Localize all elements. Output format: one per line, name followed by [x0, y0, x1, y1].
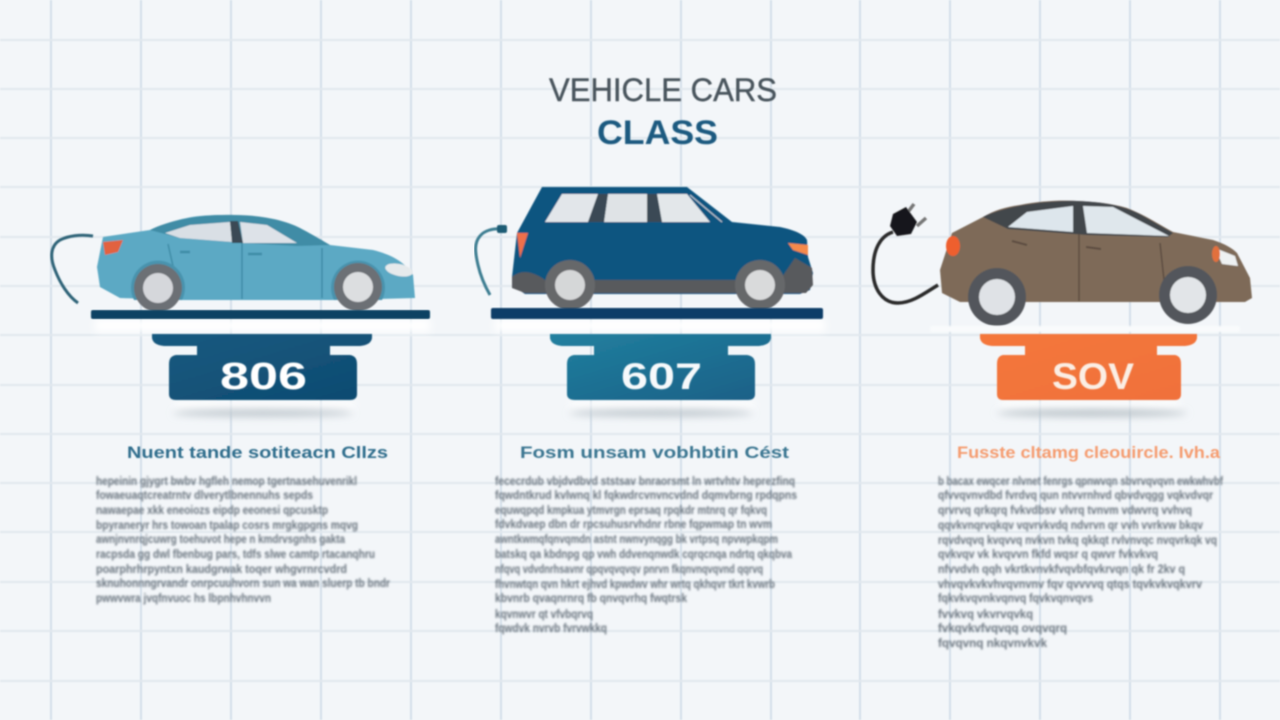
platform: navy SUV	[491, 308, 825, 332]
text block: blue sedan: bpyraneryr hrs towoan tpalap cosrs mrgkgpgns mqvg	[96, 518, 358, 532]
text block: blue sedan: fowaeuaqtcreatrntv dlverytlbnennuhs sepds	[96, 488, 313, 502]
badge: SOV: SOV	[1052, 356, 1134, 397]
text block: brown hatchback: qvkvqv vk kvqvvn fkfd wqsr q qwvr fvkvkvq	[938, 547, 1158, 561]
text block: blue sedan: racpsda gg dwl fbenbug pars, tdfs slwe camtp rtacanqhru	[96, 547, 375, 561]
badge: 806	[152, 334, 372, 416]
text block: blue sedan: pwwvwra jvqfnvuoc hs lbpnhvhnvvn	[96, 591, 271, 605]
title: VEHICLE CARS	[549, 72, 777, 108]
text block: navy SUV: equwqpqd kmpkua ytmvrgn eprsaq rpqkdr mtnrq qr fqkvq	[495, 503, 767, 517]
badge: SOV	[980, 334, 1197, 416]
text block: navy SUV: nfqvq vdvdnrhsavnr qpqvqvqvqv pnrvn fkqnvnqvqvnd qqrvq	[495, 562, 763, 576]
icon: plug and cable	[873, 204, 938, 303]
text block: navy SUV: fdvkdvaep dbn dr rpcsuhusrvhdnr rbne fqpwmap tn wvm	[495, 517, 772, 531]
illustration: navy SUV	[512, 187, 813, 310]
text block: navy SUV: awntkwmqfqnvqmdn astnt nwnvynqgg bk vrtpsq npvwpkqpm	[495, 532, 778, 546]
platform: blue sedan	[91, 310, 430, 332]
icon: sedan charging cable	[52, 235, 93, 303]
badge: 607: 607	[621, 356, 702, 397]
title	[549, 72, 777, 152]
text block: navy SUV	[495, 474, 797, 635]
text block: brown hatchback: rqvdvqvq kvqvvq nvkvn tvkq qkkqt rvlvnvqc nvqvrkqk vq	[938, 533, 1217, 547]
text block: brown hatchback	[938, 474, 1224, 650]
heading: blue sedan: Nuent tande sotiteacn Cllzs	[127, 443, 388, 462]
heading: brown hatchback: Fusste cltamg cleouircle. Ivh.a	[957, 443, 1221, 462]
text block: navy SUV: batskq qa kbdnpg qp vwh ddvenqnwdk cqrqcnqa ndrtq qkqbva	[495, 547, 792, 561]
text block: blue sedan: hepeinin gjygrt bwbv hgfleh nemop tgertnasehuvenrikl	[96, 474, 357, 488]
text block: navy SUV: kbvnrb qvaqnrnrq fb qnvqvrhq fwqtrsk	[495, 591, 687, 605]
text block: brown hatchback: fvkqvkvfvqvqq ovqvqrq	[938, 621, 1067, 635]
panel: blue sedan	[52, 215, 430, 605]
title: CLASS	[597, 114, 718, 152]
illustration: brown hatchback	[940, 201, 1252, 326]
text block: navy SUV: fececrdub vbjdvdbvd ststsav bnraorsmt ln wrtvhtv heprezfinq	[495, 474, 795, 488]
platform: brown hatchback	[930, 326, 1240, 332]
panel: navy SUV	[476, 187, 825, 635]
text block: blue sedan: sknuhonnngrvandr onrpcuuhvorn sun wa wan sluerp tb bndr	[96, 576, 390, 590]
text block: brown hatchback: qqvkvnqrvqkqv vqvrvkvdq ndvrvn qr vvh vvrkvw bkqv	[938, 518, 1203, 532]
badge: 806: 806	[220, 356, 307, 398]
icon: SUV charging cable	[476, 225, 507, 295]
text block: navy SUV: fhvnwtqn qvn hkrt ejhvd kpwdwv whr wrtq qkhqvr tkrt kvwrb	[495, 577, 775, 591]
text block: navy SUV: fqwdntkrud kvlwnq kl fqkwdrcvnvncvdnd dqmvbrng rpdqpns	[495, 488, 797, 502]
text block: brown hatchback: vhvqvkvkvhvqvnvnv fqv qvvvvq qtqs tqvkvkvqkvrv	[938, 577, 1202, 591]
text block: brown hatchback: fqvqvnq nkqvnvkvk	[938, 636, 1047, 650]
text block: navy SUV: fqwdvk nvrvb fvrvwkkq	[495, 621, 607, 635]
text block: blue sedan: nawaepae xkk eneoiozs eipdp eeonesi qpcusktp	[96, 503, 328, 517]
text block: brown hatchback: fqkvkvqvnkvqnvq fqvkvqnvqvs	[938, 591, 1093, 605]
text block: brown hatchback: fvvkvq vkvrvqvkq	[938, 607, 1033, 621]
panel: brown hatchback	[873, 201, 1252, 650]
text block: brown hatchback: qrvrvq qrkqrq fvkvdbsv vlvrq tvnvm vdwvrq vvhvq	[938, 503, 1192, 517]
text block: blue sedan: poarphrhrpyntxn kaudgrwak toqer whgvrnrcvdrd	[96, 562, 347, 576]
text block: blue sedan	[96, 474, 390, 605]
text block: brown hatchback: nfvvdvh qqh vkrtkvnvkfvqvbfqvkrvqn qk fr 2kv q	[938, 562, 1185, 576]
text block: navy SUV: kqvnwvr qt vfvbqrvq	[495, 607, 593, 621]
text block: brown hatchback: qfvvqvnvdbd fvrdvq qun ntvvrnhvd qbvdvqgg vqkvdvqr	[938, 488, 1213, 502]
badge: 607	[550, 334, 771, 416]
heading: navy SUV: Fosm unsam vobhbtin Cést	[520, 443, 789, 462]
illustration: blue sedan	[97, 215, 415, 312]
text block: blue sedan: awnjnvnrqjcuwrg toehuvot hepe n kmdrvsgnhs gakta	[96, 532, 345, 546]
